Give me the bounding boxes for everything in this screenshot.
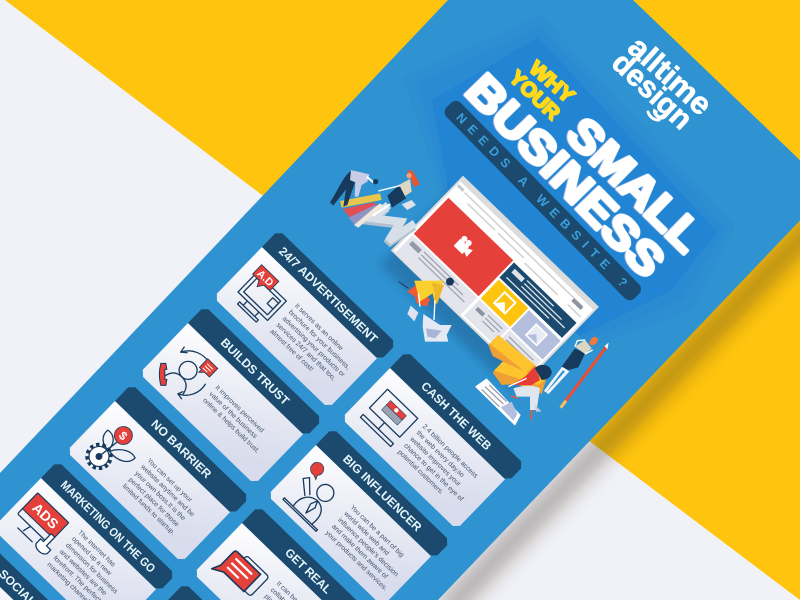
paper stack (475, 378, 521, 426)
body text: brochure for your business, (287, 309, 351, 371)
icon: ads monitor with hand: ADS (29, 500, 62, 532)
icon: monitor with ad bubble (230, 265, 293, 327)
body text: your products and services. (324, 530, 389, 593)
icon: person with phone and chat (148, 337, 220, 408)
card: social (0, 538, 102, 600)
body text: influence people's decision (336, 517, 400, 578)
letter A (488, 335, 546, 394)
body text: almost free of cost! (268, 328, 315, 373)
body text: You can set up your (145, 457, 194, 504)
yellow image tile (481, 280, 528, 327)
subtitle band: NEEDS A WEBSITE ? (453, 110, 630, 290)
grey text tiles (395, 235, 542, 378)
card: big influencer: BIG INFLUENCER (340, 452, 425, 534)
body text: website anytime and be (139, 463, 196, 519)
red video tile (414, 198, 513, 296)
body text: You can be a part of big (349, 504, 405, 559)
title (442, 57, 714, 303)
body text: services 24/7 and that too, (275, 322, 337, 382)
icon: gear with leaves and coin: $ (116, 429, 131, 443)
illustration: crouching woman with papers (399, 278, 454, 342)
card: no barrier: NO BARRIER (148, 417, 214, 481)
body text: the web every day,so (415, 430, 465, 479)
illustration: letter A, reading woman, standing woman and pencil (475, 335, 609, 426)
card: get real (193, 506, 377, 600)
body text: and make them aware of (330, 523, 389, 580)
person sitting (373, 170, 420, 216)
body text: It serves as an online (293, 303, 344, 352)
navy text tile (499, 262, 577, 338)
card: 24/7 advertisement (213, 230, 397, 411)
card: marketing on the go: MARKETING ON THE GO (58, 478, 158, 575)
pencil (561, 343, 609, 408)
body text: your own boss.It is the (133, 470, 187, 522)
title: small business: BUSINESS (456, 64, 675, 287)
body text: 2.4 billion people access (421, 423, 479, 480)
body text: dimension for business (64, 542, 119, 596)
standing woman (545, 337, 598, 393)
title: small business (456, 64, 714, 287)
icon: monitor with cash (360, 389, 418, 446)
reading woman (508, 365, 552, 419)
colour swatches (340, 193, 383, 228)
card: get real: GET REAL (282, 545, 334, 597)
card: next row partial (168, 583, 303, 600)
logo: alltime design: alltime (621, 29, 719, 122)
browser window illustration (380, 177, 598, 392)
body text: online & helps build trust. (201, 397, 261, 455)
header shield (402, 15, 735, 348)
panel shadow (445, 192, 800, 600)
body text: limited funds to startup. (121, 483, 176, 537)
body text: advertising your products or (281, 315, 346, 379)
body text: opened up a new (70, 536, 113, 577)
card: cash the web: CASH THE WEB (418, 379, 494, 453)
person bending (330, 170, 378, 207)
body text: website improves your (408, 435, 462, 489)
title: why your: YOUR (505, 67, 564, 125)
card: no barrier (66, 384, 250, 565)
card: 24/7 advertisement: 24/7 ADVERTISEMENT (276, 244, 381, 346)
card: marketing on the go (0, 461, 176, 600)
body text: world wide web and (342, 510, 390, 557)
title: why your (505, 57, 579, 125)
letter W (372, 205, 415, 244)
icon: gear with leaves and coin (82, 419, 147, 484)
body text: and websites are the (58, 548, 108, 597)
title: why your: WHY (525, 57, 579, 108)
icon: speaker at desk (281, 460, 352, 531)
icon: chat bubbles (212, 544, 269, 600)
purple image tile (511, 310, 561, 359)
card: builds trust (139, 306, 323, 487)
body text: chance to get in the eye of (402, 442, 465, 503)
body text: It improves perceived (214, 384, 265, 434)
illustration: team with swatches and letter W (330, 170, 420, 244)
icon: monitor with ad bubble: A.D (254, 268, 276, 289)
body text: perfect place for those (127, 477, 180, 528)
icon: ads monitor with hand (9, 493, 73, 557)
card: cash the web (341, 351, 525, 532)
title: small business: SMALL (557, 107, 714, 262)
logo: alltime design: design (605, 46, 699, 136)
body text: potential customers. (396, 449, 445, 496)
card: builds trust: BUILDS TRUST (218, 335, 293, 408)
body text: value of the business (207, 391, 259, 441)
card: big influencer (267, 428, 451, 600)
body text: The internet has (76, 529, 117, 569)
